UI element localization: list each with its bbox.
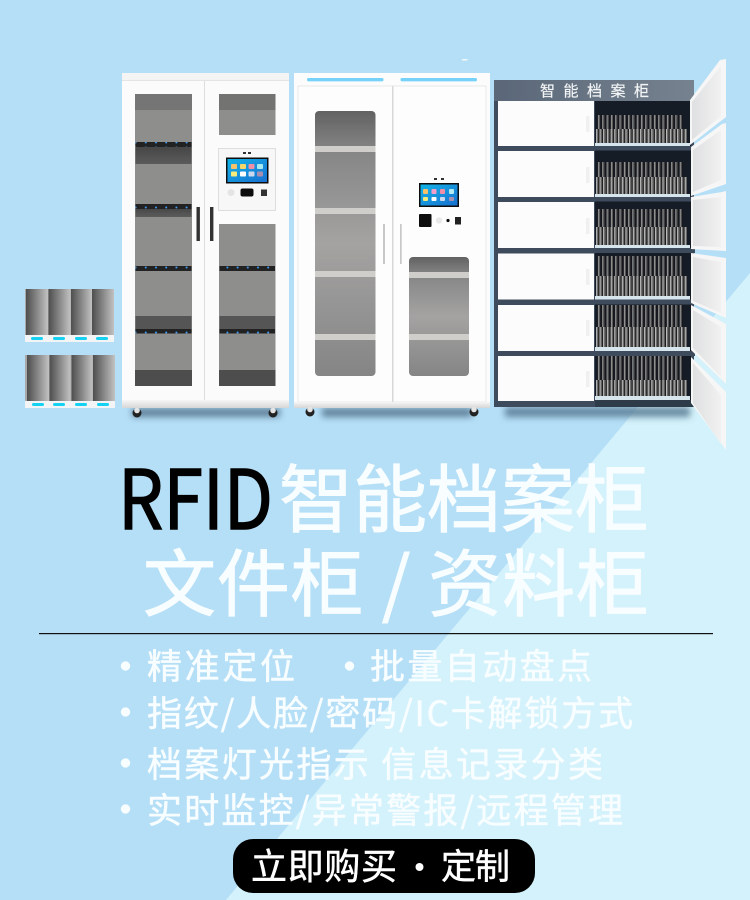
file slots row 3 <box>595 209 690 248</box>
body <box>122 73 289 408</box>
white closed sliding doors <box>498 101 594 146</box>
file slots row 2 <box>595 162 690 197</box>
title line 1: 智能档案柜 <box>279 441 649 548</box>
call to action button <box>233 838 535 893</box>
folder rack: lower <box>25 355 115 408</box>
title line 2: 文件柜 / 资料柜 <box>143 526 649 632</box>
handles <box>383 224 385 264</box>
wheels <box>306 408 314 416</box>
small light mark <box>462 59 468 60</box>
cabinet 2: white cabinet with rounded windows <box>294 59 490 416</box>
open doors on cabinet 3 <box>690 59 726 450</box>
feature row 1 <box>121 639 592 690</box>
feature list <box>121 639 633 834</box>
indicator light bars <box>307 78 384 81</box>
touch screen <box>226 158 268 184</box>
file slots row 5 <box>595 305 690 351</box>
file slots row 6 <box>595 356 690 400</box>
call to action button: 定制 <box>441 839 510 890</box>
call to action button: 立即购买 <box>251 838 397 890</box>
left rounded window <box>315 111 376 376</box>
feature row 1: 精准定位 <box>147 639 295 690</box>
file slots row 4 <box>595 256 690 300</box>
shelf ledges <box>595 146 695 150</box>
door handles <box>196 207 200 241</box>
folder rack: upper <box>25 289 114 342</box>
right upper glass window <box>219 94 276 135</box>
touch screen <box>419 183 459 207</box>
divider <box>39 633 713 634</box>
right lower glass window <box>219 224 276 386</box>
cabinet 3: six-layer drawer cabinet <box>494 80 695 407</box>
keypad and sensors <box>419 214 432 227</box>
feature row 3: 档案灯光指示 信息记录分类 <box>147 737 603 788</box>
wheels <box>132 408 142 418</box>
left glass window <box>135 94 192 386</box>
feature row 4: 实时监控/异常警报/远程管理 <box>147 783 623 834</box>
control panel <box>218 148 276 210</box>
cabinet 1: glass door cabinet with RFID shelves <box>122 73 289 418</box>
door pull marks <box>586 116 590 132</box>
header band <box>494 80 694 101</box>
feature row 1: 批量自动盘点 <box>370 639 592 690</box>
file slots row 1 <box>595 115 690 146</box>
header band: 智能档案柜 <box>540 80 658 101</box>
right rounded window <box>409 257 469 376</box>
cabinet shadows <box>132 407 690 417</box>
feature row 2: 指纹/人脸/密码/IC卡解锁方式 <box>147 686 633 737</box>
title line 1: RFID <box>118 434 273 553</box>
title line 1 <box>118 434 649 553</box>
